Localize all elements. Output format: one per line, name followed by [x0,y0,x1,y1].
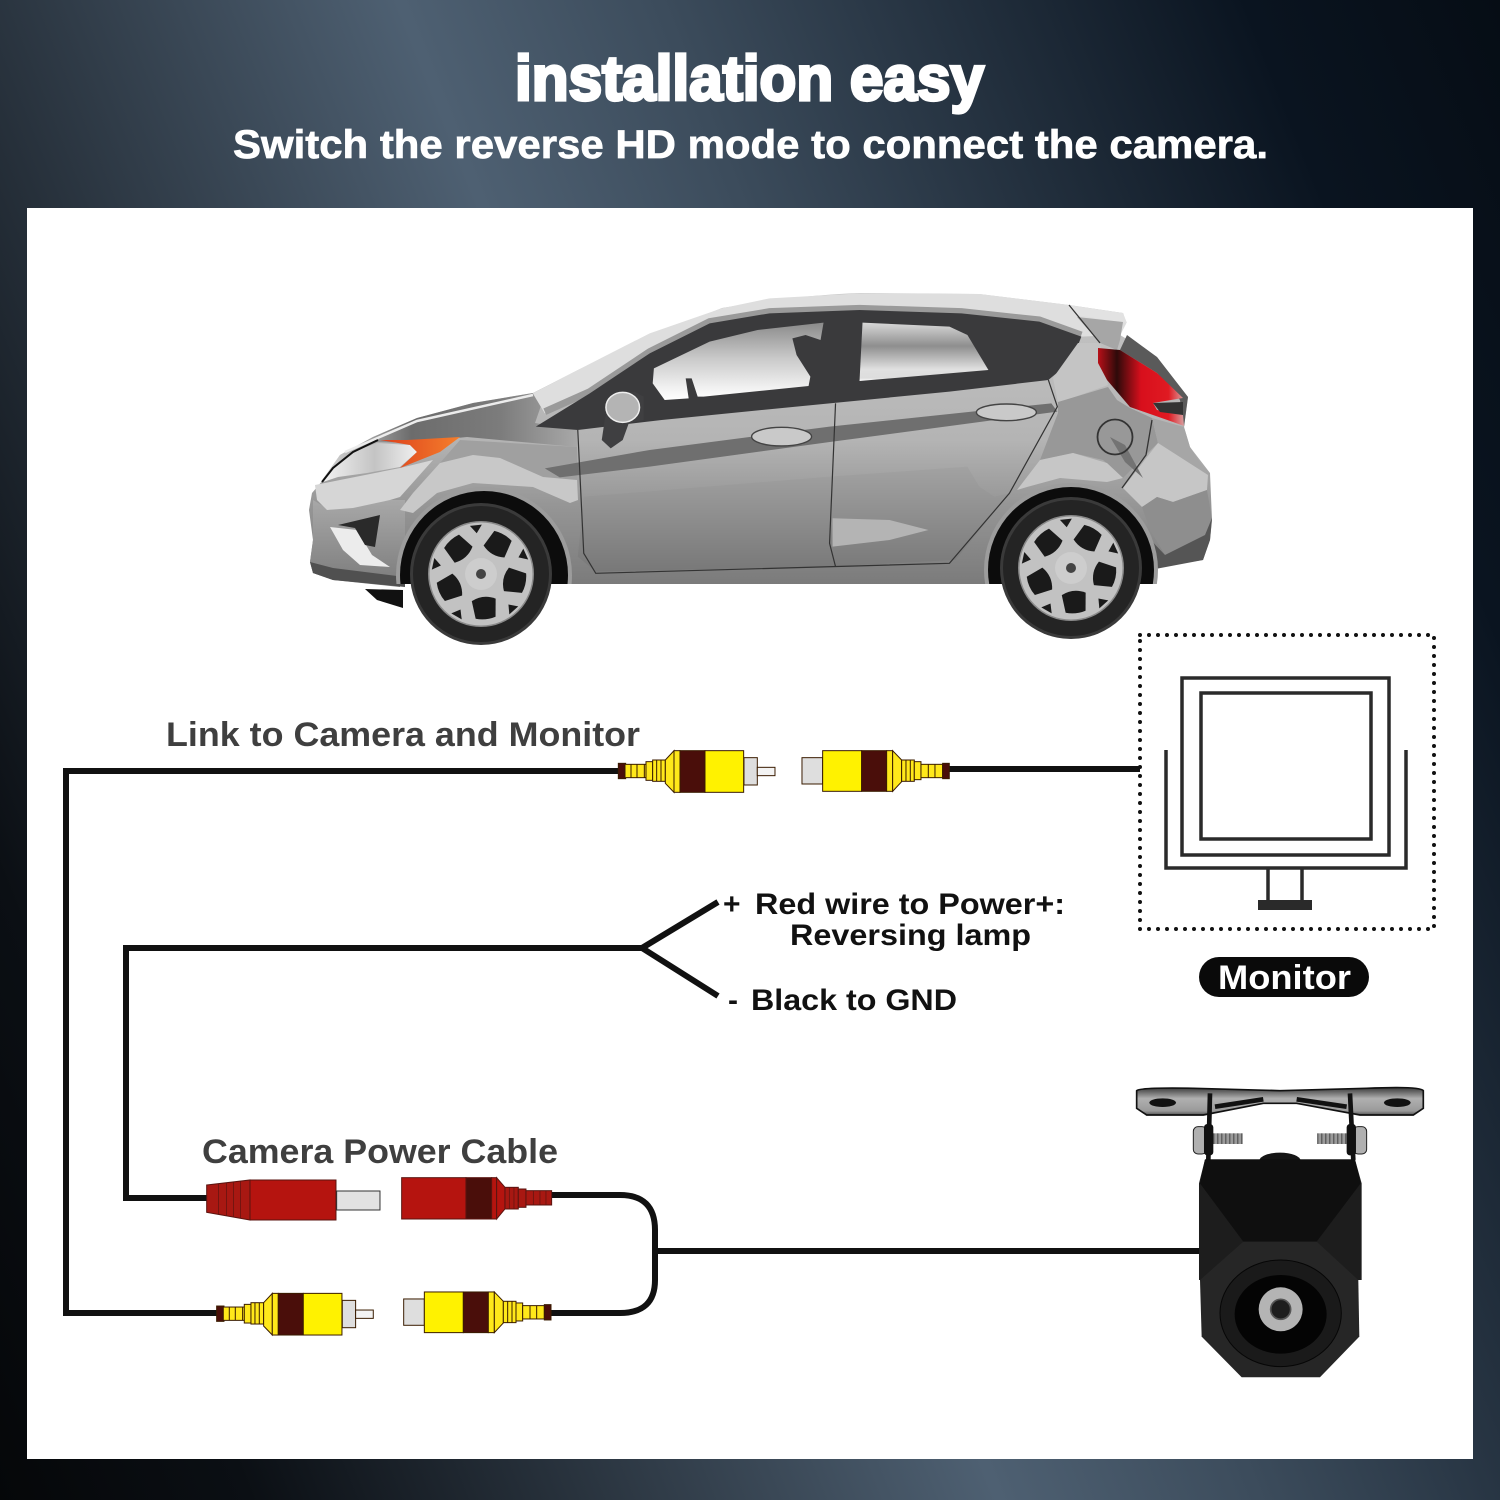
headlight edge [322,440,378,482]
quarter highlight right [1123,443,1208,507]
front bumper highlight [315,460,433,510]
lens recess [1235,1275,1327,1354]
monitor base cradle [1166,750,1406,868]
rear wheel [1000,497,1142,639]
rear window [860,323,988,381]
fog lamp surround [330,527,390,567]
connector: red female [402,1178,552,1219]
door handles [752,404,1036,446]
door panels, windows and crease [533,293,1126,573]
front window [653,323,824,400]
mounting screws [1193,1124,1367,1155]
lower door panels [578,467,1009,572]
screen outer [1182,678,1389,855]
bumper lip [310,562,405,587]
tail lamp [1098,348,1184,426]
label: black to GND: - [728,984,738,1017]
rear body lines [1069,305,1152,488]
rear spoiler [1067,305,1127,323]
wire: camera harness [548,1195,1200,1313]
camera housing [1199,1159,1362,1280]
side crease [545,403,1057,477]
mounting bracket [1137,1088,1423,1115]
connector: yellow male, top [618,751,775,792]
monitor foot [1258,900,1312,910]
icon: rear-view camera [1137,1088,1423,1377]
dotted frame [1140,635,1434,929]
front fender highlight [400,455,578,513]
camera front plate [1200,1242,1359,1377]
connector: yellow female, top [802,751,949,791]
mirror cap [606,392,640,422]
icon: monitor [1140,635,1434,929]
wire: power lead [126,902,718,1198]
hood [322,393,577,480]
bracket slots [1149,1098,1411,1107]
rear lower panel [1142,490,1212,555]
door cut lines [578,380,1057,573]
hood edge highlight [345,395,533,452]
hatch dark strip [1120,335,1188,427]
roof inner shade [545,308,1081,412]
roof highlight [533,293,1126,413]
label: black to GND: Black to GND [751,984,957,1017]
fuel door [1098,420,1132,454]
connector: yellow female, bottom [404,1292,551,1333]
rear corner shade [1152,418,1208,475]
lower front bumper [310,500,405,585]
window band [536,310,1081,430]
quarter panel upper [1053,343,1108,403]
bracket arms [1208,1093,1353,1160]
label: camera power cable: Camera Power Cable [202,1133,558,1171]
tail lamp dark wedge [1153,402,1183,415]
lens ring [1220,1260,1341,1367]
screen inner [1201,693,1371,839]
fender mid tone [440,440,577,480]
housing facet [1200,1159,1361,1242]
wheel arches [396,487,1158,584]
label: link to camera and monitor: Link to Camera and Monitor [166,716,640,754]
illustration: silver hatchback car [309,293,1212,663]
connector: red male [207,1180,380,1220]
side mirror stalk [602,392,644,448]
front wheel [410,503,552,645]
label pill: monitor [1199,957,1369,997]
fog lamp recess [338,515,380,547]
wire: camera to monitor link [66,771,620,1313]
fuel door shade [1110,437,1143,478]
connector: yellow male, bottom [217,1293,373,1335]
hatch panel [1077,317,1123,350]
monitor stand [1268,868,1302,902]
label: red wire to power: + [723,888,741,921]
lens glass [1271,1299,1291,1319]
car body silhouette [309,293,1212,587]
label: reversing lamp: Reversing lamp [790,919,1031,952]
subtitle: Switch the reverse HD mode to connect the camera. [233,123,1268,167]
rear bumper underside [1146,518,1212,570]
title: installation easy [515,44,984,114]
quarter highlight left [1017,453,1123,490]
headlight [323,443,417,482]
camera top bump [1259,1153,1301,1169]
quarter panel mid [1040,387,1158,478]
wire: to monitor [948,766,1140,772]
mud flap [365,589,403,608]
lens bezel [1259,1287,1303,1331]
label: red wire to power: Red wire to Power+: [755,888,1065,921]
headlight orange accent [380,437,460,468]
door reflection [833,518,928,547]
label pill: monitor: Monitor [1218,959,1351,997]
